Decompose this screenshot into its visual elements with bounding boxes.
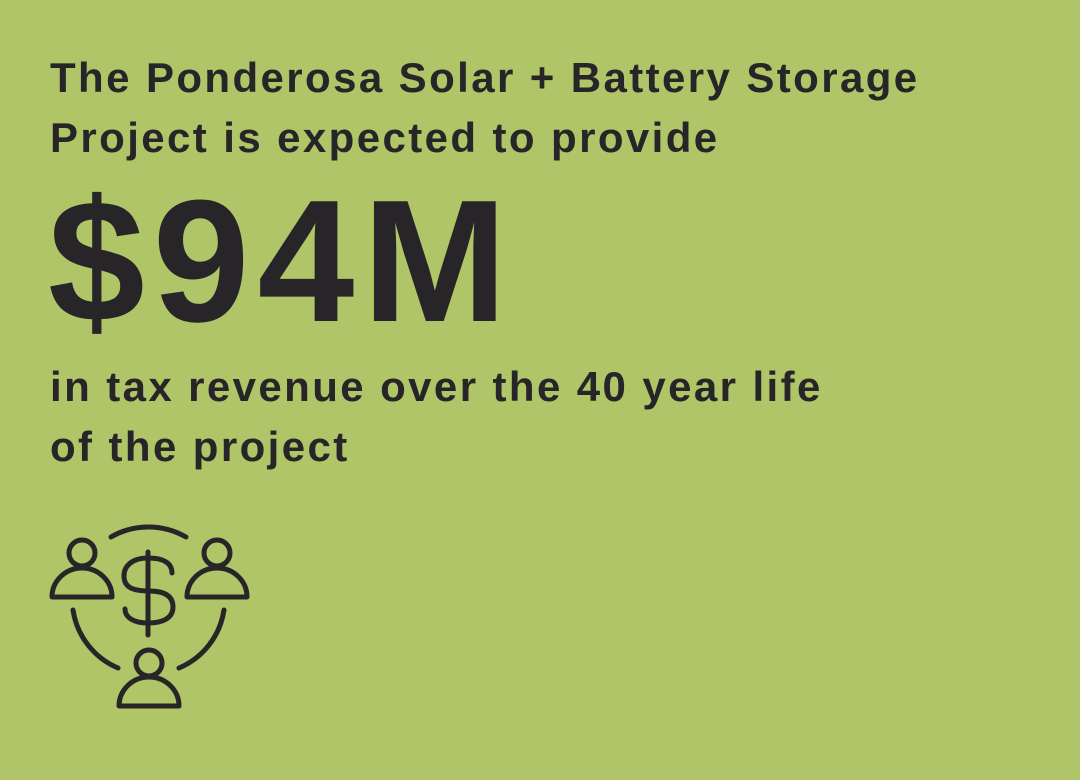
body text: of the project bbox=[50, 423, 350, 470]
heading text: The Ponderosa Solar + Battery Storage bbox=[50, 54, 920, 101]
body text: in tax revenue over the 40 year life bbox=[50, 363, 823, 410]
heading text: Project is expected to provide bbox=[50, 114, 720, 161]
heading text bbox=[50, 54, 920, 161]
body text bbox=[50, 363, 823, 470]
big number: $94M bbox=[48, 163, 515, 358]
